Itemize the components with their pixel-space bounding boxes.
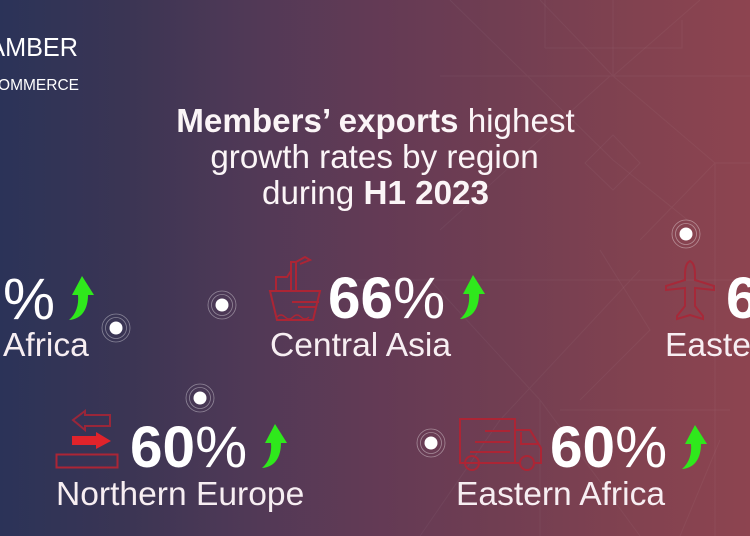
icon: ship — [270, 257, 320, 320]
icon: exchange arrows — [56, 411, 118, 468]
icon: airplane — [666, 261, 714, 319]
title: during H1 2023 — [262, 175, 489, 212]
stat: Central Asia: 66% — [328, 266, 445, 331]
stat: Eastern Africa: Eastern Africa — [456, 476, 665, 513]
stat: Africa — [3, 267, 94, 364]
stat: Northern Europe: Northern Europe — [56, 476, 304, 513]
icon: truck — [460, 419, 541, 470]
title: growth rates by region — [210, 139, 539, 176]
stat: Eastern Africa — [456, 415, 707, 513]
stat: Africa: % — [3, 267, 55, 332]
up arrow — [682, 425, 707, 469]
stat: Africa: Africa — [3, 327, 89, 364]
stat: Eastern — [665, 261, 750, 364]
stat: Central Asia — [270, 257, 485, 364]
stat: Northern Europe: 60% — [130, 415, 247, 480]
logo text — [0, 32, 79, 94]
title: Members’ exports highest — [176, 103, 575, 140]
up arrow — [460, 275, 485, 319]
title — [176, 103, 575, 212]
stat: Eastern Africa: 60% — [550, 415, 667, 480]
stat: Northern Europe — [56, 411, 304, 513]
up arrow — [69, 276, 94, 320]
up arrow — [262, 424, 287, 468]
marker dots — [102, 220, 700, 457]
stat: Central Asia: Central Asia — [270, 327, 451, 364]
